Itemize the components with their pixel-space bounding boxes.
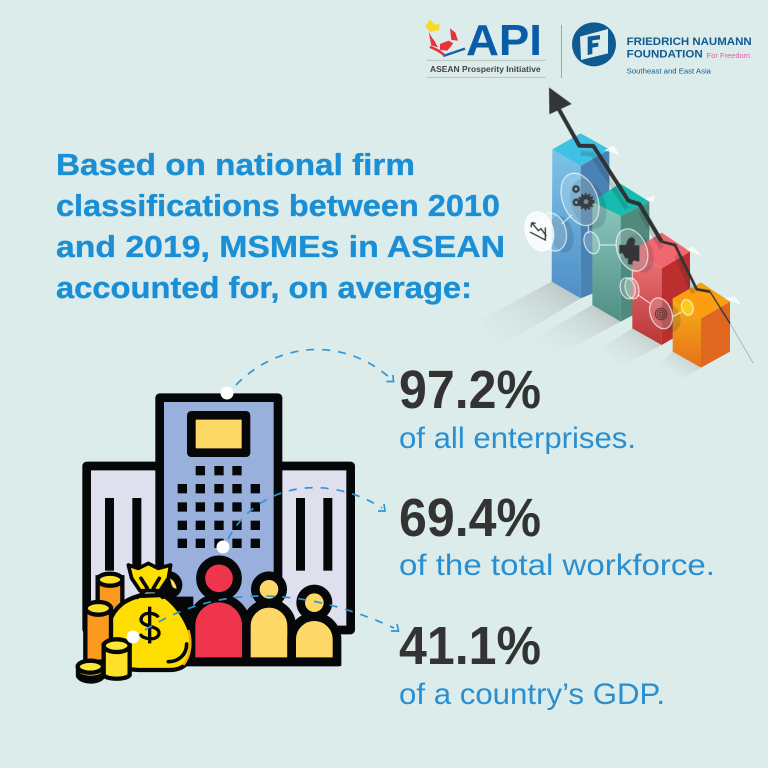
heading: [56, 148, 505, 305]
stat: enterprises: 97.2%: [399, 360, 541, 420]
bar shadows: [480, 282, 701, 378]
foundation region: Southeast and East Asia: [627, 66, 712, 75]
building, people and money illustration: [78, 398, 351, 681]
stat: GDP: of a country’s GDP.: [399, 678, 665, 711]
foundation name line 1: FRIEDRICH NAUMANN: [627, 36, 752, 48]
logo: Friedrich Naumann Foundation: [572, 22, 752, 75]
bar: orange: [673, 282, 730, 368]
building: left: [87, 466, 163, 629]
people group: [140, 560, 341, 666]
stat: GDP: 41.1%: [399, 616, 541, 676]
trend arrow: [549, 87, 753, 363]
heading: accounted for, on average:: [56, 271, 472, 305]
stat: GDP: [399, 616, 665, 711]
hidden person behind bag: [154, 571, 193, 660]
icon: target: [655, 308, 667, 320]
heading: classifications between 2010: [56, 189, 500, 223]
API tagline: ASEAN Prosperity Initiative: [430, 64, 541, 74]
dashed arrow to 41.1%: [145, 596, 398, 631]
bar: teal: [592, 183, 649, 322]
coins stacks: [98, 574, 122, 627]
stat: enterprises: [399, 360, 636, 455]
dashed arrow to 97.2%: [236, 350, 394, 385]
bar: red: [632, 233, 690, 345]
bubble shadows: [546, 174, 684, 335]
icon: ASEAN map: [425, 19, 465, 56]
money bag: [106, 563, 193, 670]
front coins: [78, 602, 130, 681]
stat: enterprises: of all enterprises.: [399, 422, 636, 455]
bar: blue: [552, 133, 609, 298]
foundation name line 2: FOUNDATION: [627, 48, 703, 60]
arrow shadow on bars: [581, 153, 693, 293]
dashed arrow to 69.4%: [228, 488, 385, 539]
stat: workforce: [399, 488, 715, 582]
icon: gears: [573, 186, 593, 209]
icon: small chart: [530, 223, 546, 240]
logo divider: [561, 25, 562, 78]
icon: puzzle piece: [619, 237, 639, 265]
heading: and 2019, MSMEs in ASEAN: [56, 230, 505, 264]
logo: ASEAN Prosperity Initiative: [425, 17, 546, 77]
heading: Based on national firm: [56, 148, 415, 182]
sparkles: [604, 145, 742, 305]
rule: [427, 60, 546, 77]
3D bar chart with arrow: [480, 87, 753, 378]
foundation slogan: For Freedom.: [707, 51, 752, 60]
icon: F circle: [572, 22, 616, 66]
API wordmark: API: [466, 17, 542, 65]
marker dots: [126, 386, 234, 644]
building: centre tower: [160, 398, 278, 658]
network of circles with icons: [521, 167, 695, 332]
building: right: [273, 466, 351, 630]
stat: workforce: of the total workforce.: [399, 549, 715, 582]
stat: workforce: 69.4%: [399, 488, 541, 548]
